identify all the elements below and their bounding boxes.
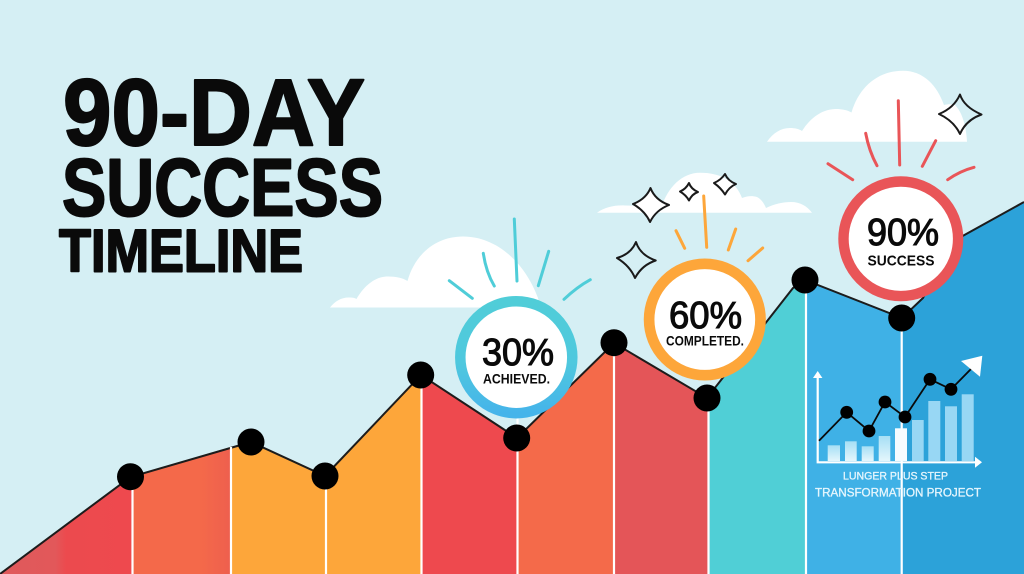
label: success: SUCCESS [868, 252, 934, 270]
chart arrowhead [961, 356, 982, 377]
sparkle top right [939, 94, 982, 134]
node under 90% [888, 304, 915, 332]
milestone: 90% success [828, 101, 974, 296]
ring: 60% [649, 264, 760, 375]
ring: 30% [460, 301, 572, 413]
value: 60%: 60% [669, 295, 742, 337]
value: 30%: 30% [482, 332, 554, 374]
ring: 90% [844, 182, 958, 296]
caption line 1: LUNGER PLUS STEP [843, 470, 948, 482]
sparkle near 60% upper [633, 188, 669, 222]
milestone: 60% completed [649, 196, 763, 375]
node under 30% [503, 424, 530, 452]
cloud: middle behind 60% [597, 173, 812, 213]
rays: 90% [828, 101, 974, 180]
label: achieved: ACHIEVED. [483, 371, 550, 386]
sparkle small [680, 183, 698, 200]
node under 60% [694, 384, 720, 412]
chart trend nodes [840, 373, 957, 437]
sparkle small right [714, 174, 736, 194]
timeline outline [0, 202, 1024, 574]
rays: 30% [449, 219, 590, 299]
title line: 90-DAY: 90-DAY [63, 60, 365, 166]
title [59, 60, 383, 284]
rays: 60% [676, 196, 763, 261]
milestone: 30% achieved [449, 219, 590, 413]
chart bars [828, 394, 974, 461]
cloud: left behind 30% [330, 236, 540, 308]
chart caption [815, 470, 982, 500]
sparkles [617, 94, 982, 278]
chart axes [813, 371, 982, 468]
vertical white dividers [132, 280, 902, 574]
timeline nodes [117, 266, 818, 490]
cloud: right behind 90% [767, 71, 967, 142]
chart trend line [819, 368, 972, 441]
mini bar and line chart [813, 356, 982, 468]
caption line 2: TRANSFORMATION PROJECT [815, 486, 982, 500]
area chart segments [0, 202, 1024, 574]
sparkle near 60% lower [617, 242, 656, 278]
title line: TIMELINE: TIMELINE [59, 218, 303, 284]
title line: SUCCESS: SUCCESS [62, 142, 383, 234]
value: 90%: 90% [867, 212, 939, 254]
label: completed: COMPLETED. [666, 334, 744, 349]
